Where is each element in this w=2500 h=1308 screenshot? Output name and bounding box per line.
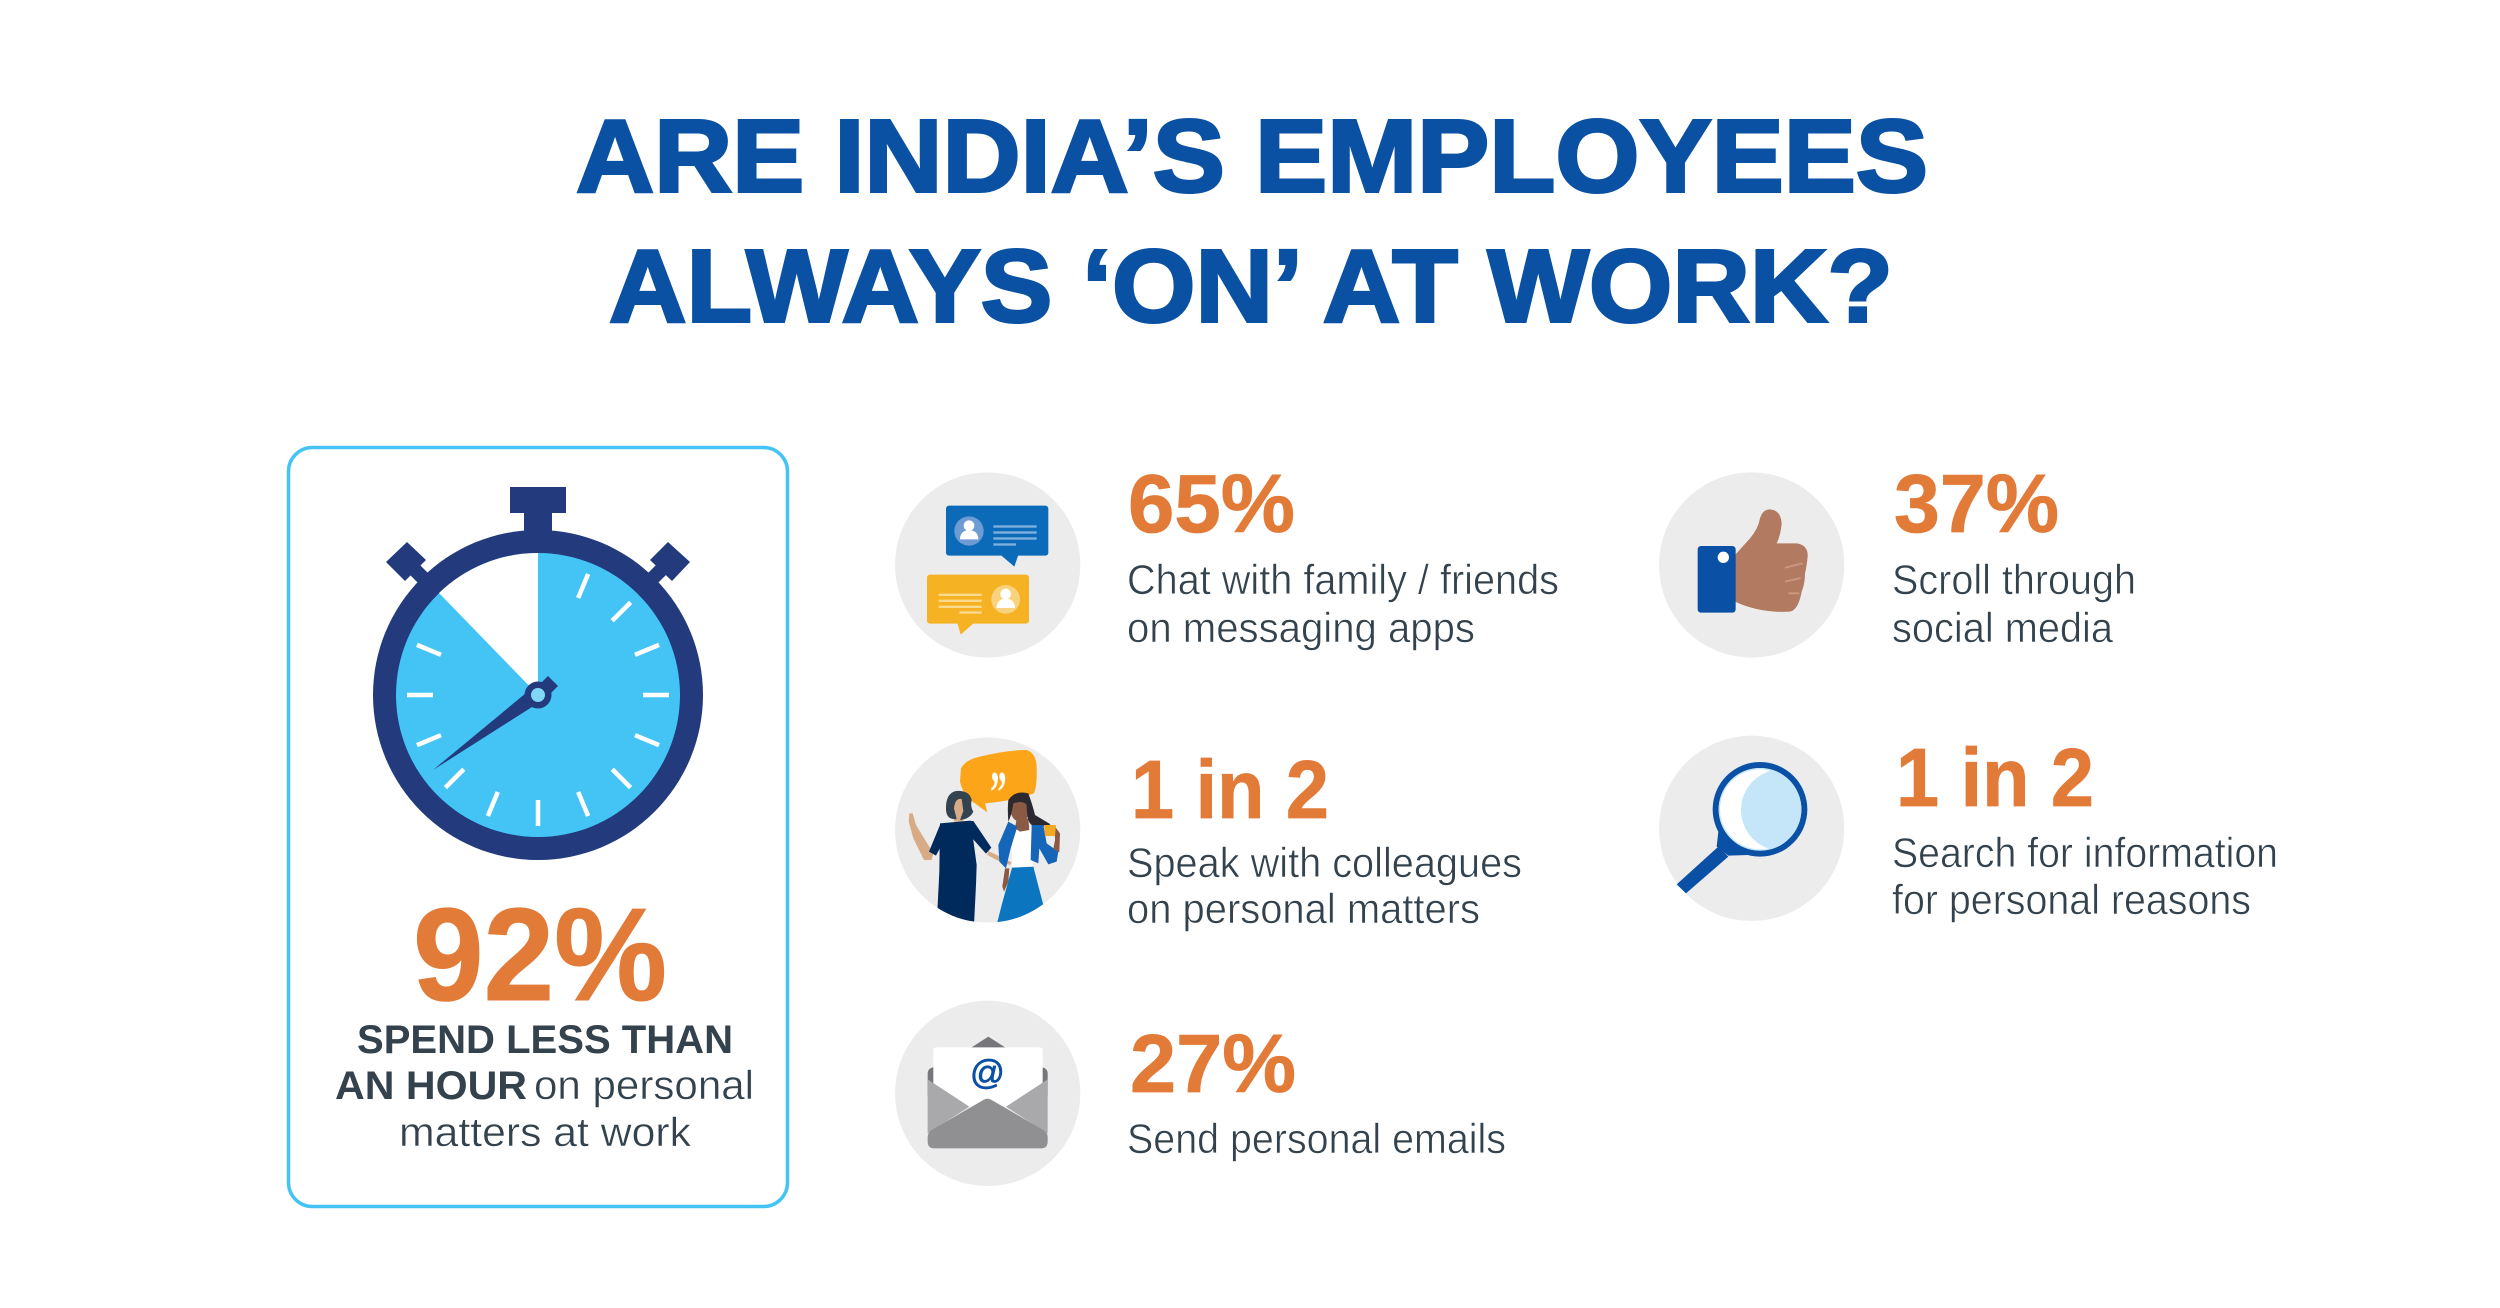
description: on personal matters: [1127, 885, 1480, 932]
item: social media: [1659, 457, 2136, 658]
statistic: 65%: 65%: [1128, 457, 1295, 550]
icon: magnifying glass: [1659, 736, 1844, 921]
description: [1127, 556, 1559, 651]
icon: two women talking: [895, 737, 1080, 925]
icon: thumbs up: [1659, 472, 1844, 658]
statistic: 92%: 92%: [413, 881, 667, 1028]
description: Chat with family / friends: [1127, 556, 1559, 603]
item: search for information: [1659, 731, 2278, 923]
caption: [335, 1018, 754, 1155]
title: [576, 98, 1928, 344]
title: ALWAYS ‘ON’ AT WORK?: [609, 228, 1893, 344]
description: social media: [1892, 604, 2114, 651]
caption: AN HOUR: [335, 1064, 527, 1108]
statistic: 1 in 2: 1 in 2: [1896, 731, 2094, 824]
item: chat with family: [895, 457, 1559, 658]
item: personal emails: [895, 1001, 1506, 1186]
icon: two women talking: ”: [990, 760, 1007, 826]
description: for personal reasons: [1892, 876, 2251, 923]
description: Speak with colleagues: [1127, 839, 1522, 886]
description: Search for information: [1892, 829, 2278, 876]
description: on messaging apps: [1127, 604, 1475, 651]
statistic: 37%: 37%: [1894, 457, 2059, 550]
description: Send personal emails: [1127, 1115, 1506, 1162]
caption: on personal: [534, 1062, 754, 1108]
caption: matters at work: [399, 1109, 692, 1155]
icon: envelope: @: [970, 1054, 1005, 1092]
statistic: 27%: 27%: [1130, 1017, 1296, 1110]
icon: stopwatch: [373, 487, 703, 860]
description: [1892, 829, 2278, 923]
icon: envelope: [895, 1001, 1080, 1186]
statistic: 1 in 2: 1 in 2: [1131, 743, 1329, 836]
panel border: [288, 448, 788, 1206]
caption: SPEND LESS THAN: [357, 1018, 733, 1062]
description: [1892, 556, 2136, 651]
item: speak with colleagues: [895, 737, 1522, 932]
description: Scroll through: [1892, 556, 2136, 603]
title: ARE INDIA’S EMPLOYEES: [576, 98, 1928, 214]
panel: 92% stopwatch: [288, 448, 788, 1206]
description: [1127, 839, 1522, 932]
icon: chat bubbles: [895, 472, 1080, 658]
